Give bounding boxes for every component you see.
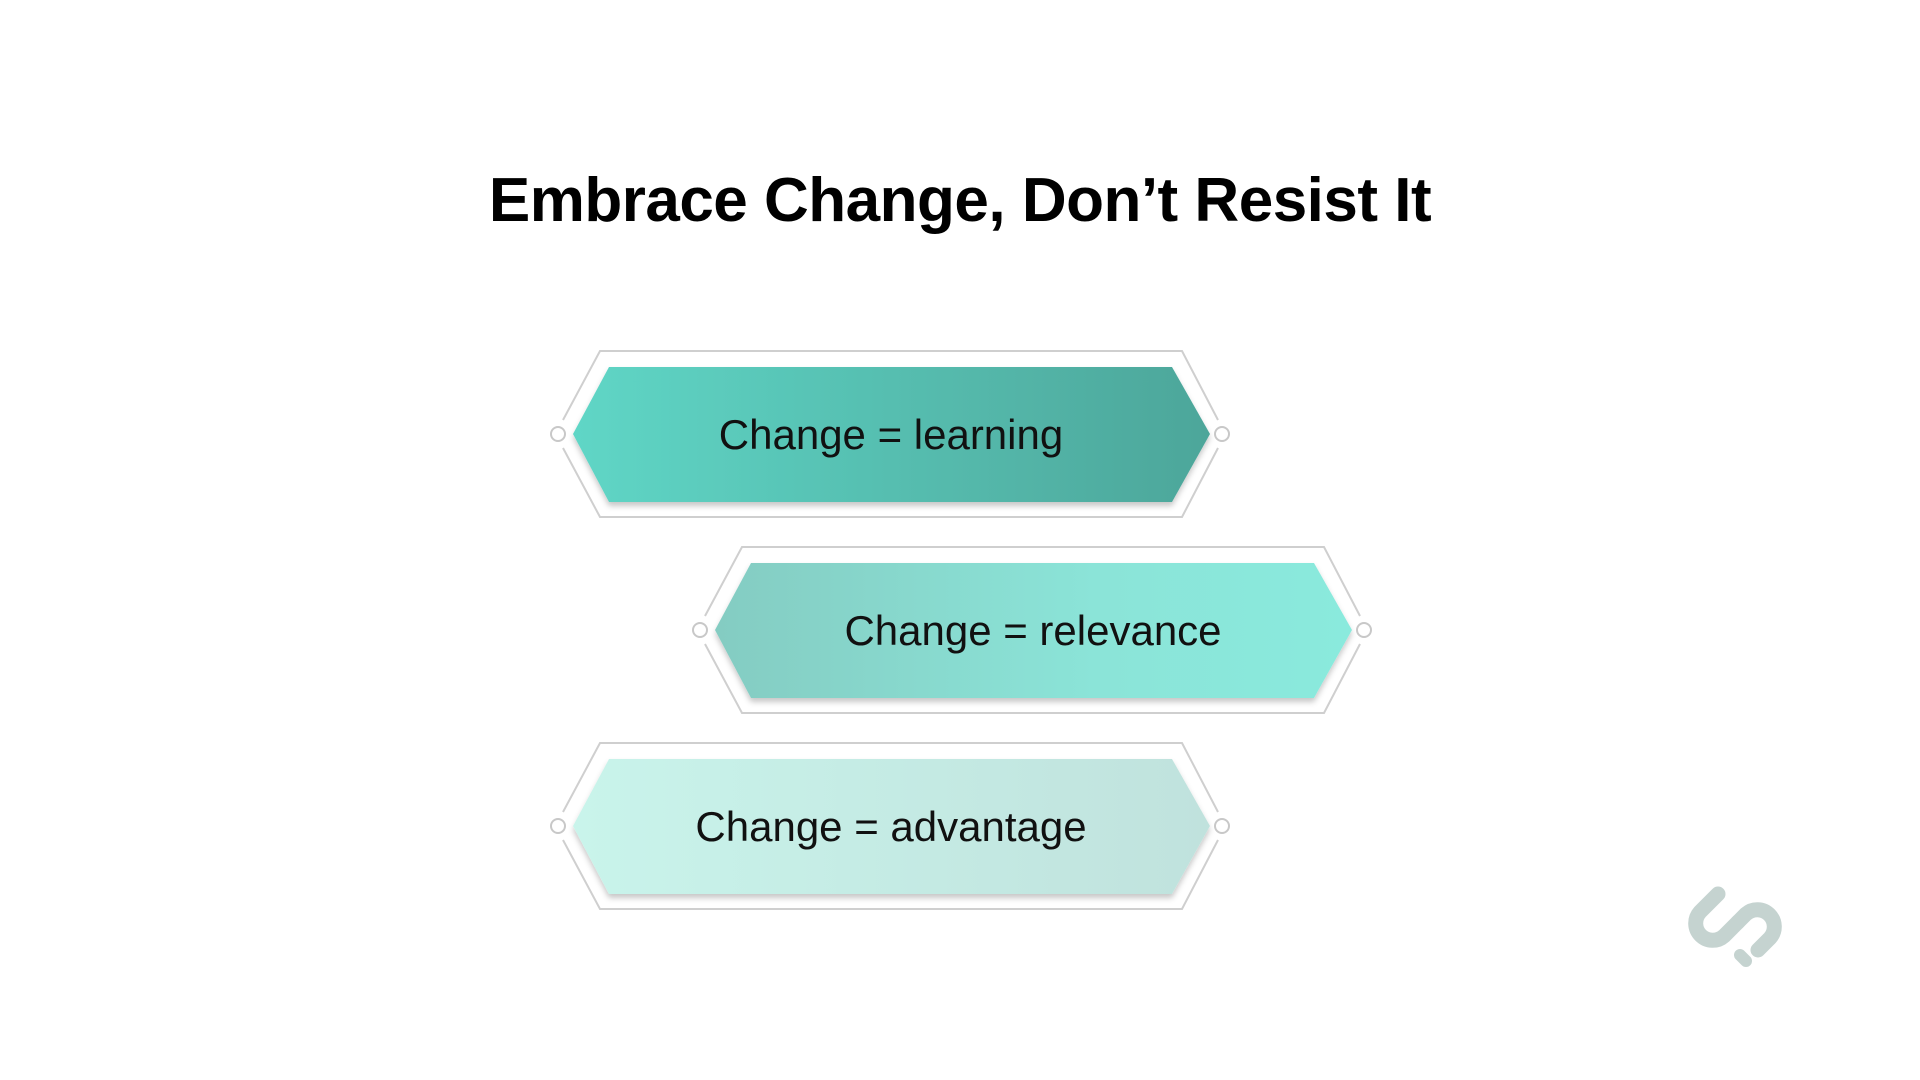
box: change = advantage: Change = advantage bbox=[695, 803, 1087, 850]
box: change = relevance: Change = relevance bbox=[844, 607, 1222, 654]
icon: logo bbox=[1696, 894, 1774, 961]
box: change = learning: Change = learning bbox=[719, 411, 1063, 458]
box: change = relevance bbox=[693, 547, 1371, 713]
title: Embrace Change, Don’t Resist It bbox=[489, 166, 1431, 235]
box: change = learning bbox=[551, 351, 1229, 517]
box: change = advantage bbox=[551, 743, 1229, 909]
